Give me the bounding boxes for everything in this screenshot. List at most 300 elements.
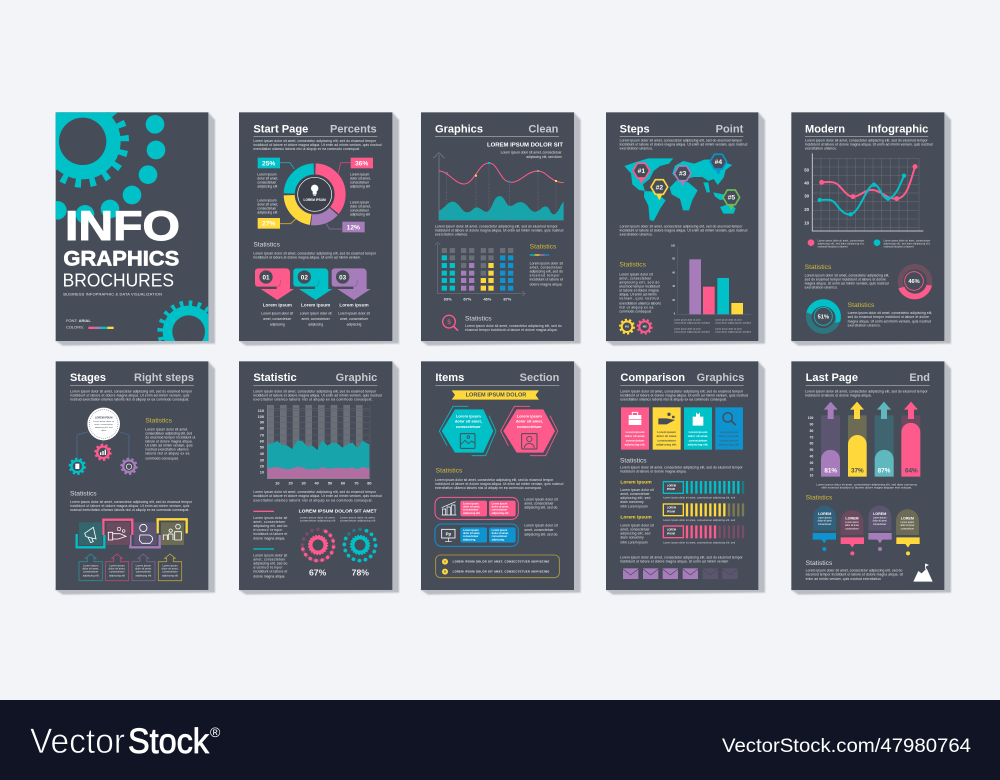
heading bbox=[620, 372, 744, 385]
tag yellow: LOREM bbox=[901, 516, 914, 520]
tile yellow: dolor sit amet, bbox=[656, 434, 677, 438]
side text two: Lorem ipsum dolor sit bbox=[620, 523, 654, 527]
callout teal bbox=[79, 554, 102, 581]
side text one: nibh Lorem ipsum bbox=[620, 504, 648, 508]
row: blue items: Lorem ipsum bbox=[463, 529, 479, 532]
step 01: 01 bbox=[262, 274, 270, 281]
callout text blocks: Lorem ipsum bbox=[350, 173, 369, 177]
note teal: Lorem ipsum dolor sit bbox=[253, 554, 287, 558]
note teal: dolore magna aliqua. bbox=[253, 575, 285, 579]
icon square: people bbox=[161, 522, 184, 545]
statistics text bbox=[253, 251, 377, 259]
statistics text: veniam, quis nostrud bbox=[619, 297, 659, 301]
column pink bbox=[901, 402, 920, 477]
meter teal: IPSUM bbox=[667, 488, 675, 491]
statistics side text: labore et dolore magna aliqua. bbox=[145, 440, 193, 444]
row: pink items: adipiscing elit. bbox=[463, 512, 481, 515]
heading: Graphic bbox=[336, 372, 377, 384]
intro text: exercitation ullamco. bbox=[805, 146, 837, 150]
note teal bbox=[253, 548, 287, 579]
intro text: exercitation ullamco laboris nisi ut aliquip ex ea commodo consequat. bbox=[253, 147, 360, 151]
row: blue items bbox=[435, 524, 518, 546]
chart notes: Lorem ipsum dolor sit amet bbox=[674, 319, 701, 322]
statistics text: eiusmod tempor incididunt bbox=[619, 284, 660, 288]
title: GRAPHICS: GRAPHICS bbox=[63, 248, 179, 271]
heading: Clean bbox=[528, 123, 559, 135]
intro text: Lorem ipsum dolor sit amet, consectetur adipiscing elit, sed do eiusmod tempor bbox=[620, 138, 743, 142]
callout pink: Lorem ipsum bbox=[109, 563, 125, 567]
bar chart: 20 bbox=[672, 300, 676, 302]
row side text: Lorem ipsum dolor sit bbox=[524, 524, 558, 528]
statistics text: Lorem ipsum dolor sit amet, consectetur adipiscing elit, sed do eiusmod tempor bbox=[253, 251, 377, 255]
side text two: amet, consectetuer bbox=[620, 527, 651, 531]
statistics text one: sed do eiusmod tempor incididunt ut labore et dolore bbox=[805, 277, 886, 281]
intro text: nostrud exercitation ullamco laboris nisi ut aliquip ex ea commodo consequat. bbox=[70, 397, 189, 401]
note teal: incididunt ut labore et bbox=[253, 570, 287, 574]
intro text: incididunt ut labore et dolore magna aliqua. Ut enim ad minim veniam, quis bbox=[70, 393, 190, 397]
row side text bbox=[524, 497, 558, 536]
intro text: Lorem ipsum dolor sit amet, consectetur adipiscing elit, sed do eiusmod tempor bbox=[253, 389, 377, 393]
statistics text bbox=[530, 244, 563, 286]
area chart: 90 bbox=[260, 421, 264, 425]
stepped frame bbox=[77, 519, 187, 547]
panel: start page bbox=[239, 112, 399, 346]
gear: pink bbox=[95, 445, 111, 460]
intro text bbox=[620, 389, 748, 401]
tag blue: consectetuer bbox=[818, 523, 832, 526]
body text bbox=[620, 224, 747, 236]
tile blue: adipiscing elit. bbox=[719, 443, 740, 447]
tile blue: dolor sit amet, bbox=[719, 434, 739, 438]
body text bbox=[435, 224, 563, 236]
bar chart: 0 bbox=[674, 313, 676, 315]
row: blue items: dolor sit amet, bbox=[492, 532, 509, 535]
statistics footer bbox=[465, 315, 562, 332]
step 02: 02 bbox=[301, 274, 308, 281]
gear: purple bbox=[121, 459, 137, 474]
gauges title: Lorem ipsum dolor sit amet, bbox=[340, 516, 376, 519]
donut 46%: 46% bbox=[908, 279, 920, 285]
area chart: 70 bbox=[260, 433, 264, 437]
callouts: percentages: 12% bbox=[347, 224, 360, 231]
colors legend: COLORS: bbox=[66, 325, 84, 330]
callout yellow: consectetuer bbox=[162, 569, 178, 573]
callout text blocks: adipiscing elit bbox=[257, 185, 277, 189]
gear: teal bbox=[70, 459, 85, 474]
node: white circle bbox=[87, 408, 120, 440]
column teal: 87% bbox=[878, 467, 891, 474]
gauges title: Lorem ipsum dolor sit amet, bbox=[300, 516, 336, 519]
tile yellow bbox=[653, 407, 681, 450]
icon: bottom gear bbox=[157, 300, 208, 341]
square pictogram chart: 46% bbox=[483, 297, 492, 302]
callout text blocks: adipiscing elit bbox=[257, 211, 277, 215]
hexagon pink bbox=[501, 406, 558, 456]
body text bbox=[253, 490, 382, 502]
chart title bbox=[487, 143, 564, 159]
statistics text bbox=[620, 458, 744, 474]
intro text: exercitation ullamco. bbox=[620, 146, 653, 150]
step 01: amet, consectetuer bbox=[263, 317, 292, 321]
icon: pink gear bbox=[638, 320, 652, 334]
area chart: 20 bbox=[289, 482, 293, 486]
hexagon pink: Lorem ipsum bbox=[517, 413, 542, 418]
statistics side text: Ut enim ad minim veniam, quis bbox=[145, 444, 193, 448]
chart notes: Lorem ipsum dolor sit amet bbox=[715, 319, 742, 322]
statistics text: Lorem ipsum dolor sit amet, consectetur adipiscing elit, sed do eiusmod tempor bbox=[620, 466, 744, 470]
body text: exercitation ullamco laboris nisi ut aliquip ex ea commodo consequat. bbox=[253, 498, 373, 502]
note teal: eiusmod tempor bbox=[253, 566, 284, 570]
step 02: Lorem ipsum dolor sit bbox=[300, 311, 332, 315]
statistics side text: laboris nisi ut aliquip ex ea bbox=[145, 452, 189, 456]
bar chart: 100 bbox=[671, 245, 676, 247]
bar chart: 80 bbox=[672, 259, 676, 261]
area chart bbox=[258, 405, 371, 486]
side text two: Lorem ipsum bbox=[620, 515, 652, 521]
node: white circle: amet, consectetuer bbox=[94, 423, 113, 426]
tile teal: consectetuer bbox=[689, 438, 708, 442]
title: INFO: INFO bbox=[65, 202, 180, 249]
lower text bbox=[620, 556, 744, 564]
statistics heading: Statistics bbox=[806, 494, 833, 501]
statistics text one: magna aliqua. Ut enim ad minim veniam, quis nostrud bbox=[805, 281, 889, 285]
heading: Stages bbox=[70, 372, 106, 384]
statistics text: Lorem ipsum dolor sit amet, consectetur adipiscing elit, sed do eiusmod tempor bbox=[435, 478, 554, 482]
tile teal bbox=[684, 407, 712, 450]
statistics text: Statistics bbox=[530, 244, 557, 251]
statistics text: amet, consectetuer bbox=[530, 265, 563, 269]
panel: modern infographic bbox=[791, 112, 951, 346]
tile yellow: adipiscing elit. bbox=[656, 443, 677, 447]
icon: light bulb bbox=[311, 185, 318, 196]
heading bbox=[435, 372, 560, 385]
row: blue items: consectetuer bbox=[463, 535, 478, 538]
statistics side text: do eiusmod tempor incididunt ut bbox=[145, 436, 195, 440]
callout purple: Lorem ipsum bbox=[136, 563, 152, 567]
area chart: 60 bbox=[341, 482, 345, 486]
font note: FONT: ARIAL bbox=[66, 318, 91, 323]
statistics text: adipiscing elit, sed do bbox=[619, 280, 659, 284]
line and area chart bbox=[433, 153, 564, 220]
scale labels bbox=[808, 416, 813, 478]
panel: graphics bbox=[421, 112, 581, 346]
side text two: adipiscing elit, sed bbox=[620, 531, 650, 535]
row side text: adipiscing elit, sed do. bbox=[524, 506, 558, 510]
meter pink: LOREM bbox=[667, 529, 676, 532]
statistics text: incididunt ut labore et dolore magna aliqua. Ut enim ad minim veniam, quis nostrud bbox=[435, 482, 563, 486]
heading: Start Page bbox=[253, 123, 308, 135]
line chart: 10 bbox=[804, 220, 810, 225]
gauge 67% bbox=[297, 524, 339, 578]
logo bbox=[30, 722, 221, 761]
intro text bbox=[253, 389, 382, 401]
callout text blocks: consectetuer bbox=[257, 181, 277, 185]
statistics text one bbox=[805, 264, 889, 290]
line chart: 40 bbox=[804, 180, 810, 185]
callout text blocks: dolor sit amet, bbox=[350, 204, 371, 208]
step 02: Lorem ipsum bbox=[301, 302, 330, 307]
square pictogram chart bbox=[435, 242, 525, 302]
tile teal: Lorem ipsum bbox=[689, 430, 708, 434]
side text two: diam nonummy bbox=[620, 535, 644, 539]
footer bar bbox=[0, 700, 1000, 780]
callout teal: consectetuer bbox=[83, 569, 98, 573]
callouts: percentages: 36% bbox=[355, 160, 368, 167]
row one, graphics and steps bbox=[421, 112, 765, 346]
tag pink bbox=[841, 510, 864, 555]
icon square: megaphone bbox=[79, 522, 102, 545]
meter teal: LOREM bbox=[667, 484, 676, 487]
intro text: incididunt ut labore et dolore magna aliqua. Ut enim ad minim veniam, quis nostrud bbox=[620, 142, 747, 146]
scale labels: 20 bbox=[810, 467, 813, 471]
scale labels: 70 bbox=[810, 435, 813, 439]
intro text: incididunt ut labore et dolore magna aliqua. Ut enim ad minim veniam, quis nostrud bbox=[253, 393, 382, 397]
column purple bbox=[821, 402, 840, 477]
statistics side text: commodo consequat. bbox=[145, 457, 179, 461]
legend: euismod tincidunt ut laoreet bbox=[884, 246, 914, 249]
statistics text: amet, consectetuer bbox=[619, 276, 652, 280]
connectors bbox=[77, 432, 129, 459]
area chart: 50 bbox=[328, 482, 332, 486]
statistics text bbox=[70, 500, 193, 512]
legend: adipiscing elit, sed diam adipiscing elit, bbox=[884, 243, 931, 246]
icon: magnifier: $ bbox=[447, 320, 451, 326]
tag yellow bbox=[896, 509, 920, 555]
step 01 bbox=[255, 268, 294, 327]
statistics text: nisi ut aliquip ex ea bbox=[619, 305, 653, 309]
chart notes: consectetuer adipiscing elit, sed diam bbox=[715, 331, 751, 334]
callout purple: consectetuer bbox=[136, 569, 151, 573]
tag blue: Lorem ipsum bbox=[818, 517, 831, 520]
body text: exercitation ullamco. bbox=[620, 232, 653, 236]
step 01: adipiscing bbox=[270, 323, 285, 327]
side text two: nibh Lorem ipsum bbox=[620, 540, 648, 544]
area chart: 40 bbox=[315, 482, 319, 486]
note teal: adipiscing elit, sed do bbox=[253, 562, 287, 566]
statistics side text: nostrud exercitation ullamco bbox=[145, 448, 189, 452]
statistics heading: Statistics bbox=[253, 241, 281, 248]
icon: yellow gear bbox=[620, 320, 634, 334]
legend bbox=[808, 239, 931, 249]
column teal bbox=[875, 402, 894, 477]
column pink: 64% bbox=[905, 467, 918, 474]
gauges title: LOREM IPSUM DOLOR SIT AMET bbox=[299, 509, 377, 514]
heading: Steps bbox=[620, 123, 650, 135]
statistics text: incididunt ut labore et dolore magna aliqua. bbox=[620, 470, 687, 474]
intro text: incididunt ut labore et dolore magna aliqua. bbox=[805, 393, 872, 397]
title: BROCHURES: BROCHURES bbox=[63, 270, 174, 291]
statistics text: Statistics bbox=[619, 261, 647, 268]
tag blue: dolor sit amet bbox=[818, 520, 832, 523]
intro text bbox=[620, 138, 747, 150]
map pin 2: #2 bbox=[656, 184, 663, 191]
area chart: 60 bbox=[260, 439, 264, 443]
area chart: 110 bbox=[258, 409, 264, 413]
step 01: Lorem ipsum bbox=[263, 302, 292, 307]
row: pink items: Lorem ipsum bbox=[463, 502, 479, 505]
heading bbox=[435, 123, 559, 137]
chart notes: Lorem ipsum dolor sit amet bbox=[674, 328, 701, 331]
hexagon pink: dolor sit amet, bbox=[516, 419, 543, 424]
scale labels: 100 bbox=[808, 416, 813, 420]
area chart: 10 bbox=[260, 471, 264, 475]
row: blue items: Lorem ipsum bbox=[492, 529, 508, 532]
tile yellow: consectetuer bbox=[657, 438, 677, 442]
callout teal: dolor sit amet, bbox=[82, 566, 99, 570]
row side text: amet, consectetuer bbox=[524, 528, 555, 532]
intro text bbox=[805, 138, 933, 150]
callout text blocks: consectetuer bbox=[350, 208, 370, 212]
tag blue bbox=[813, 506, 836, 551]
body text: incididunt ut labore et dolore magna aliqua. Ut enim ad minim veniam, quis nostrud bbox=[620, 228, 747, 232]
meter teal: Lorem ipsum dolor sit amet, consectetuer adipiscing elit, sed bbox=[663, 497, 736, 500]
callouts: percentages: 27% bbox=[262, 221, 275, 228]
scale labels: 30 bbox=[810, 461, 813, 465]
callout text blocks: consectetuer bbox=[350, 181, 370, 185]
node: white circle: LOREM IPSUM bbox=[95, 416, 112, 419]
area chart: 50 bbox=[260, 445, 264, 449]
map pin 4 bbox=[710, 154, 727, 175]
hexagon pink: consectetuer bbox=[517, 424, 542, 429]
image id: VectorStock.com/47980764 bbox=[722, 736, 971, 757]
chart title: Lorem ipsum dolor sit amet, consectetuer bbox=[501, 150, 563, 154]
step 02: adipiscing bbox=[308, 323, 323, 327]
intro text bbox=[70, 389, 193, 401]
intro text: exercitation ullamco laboris nisi ut aliquip ex ea commodo consequat. bbox=[620, 397, 727, 401]
row: pink items: dolor sit amet, bbox=[492, 506, 509, 509]
area chart: 10 bbox=[275, 482, 279, 486]
callout text blocks: Lorem ipsum bbox=[257, 199, 277, 203]
intro text bbox=[805, 389, 929, 397]
intro text: exercitation ullamco laboris nisi ut aliquip ex ea commodo consequat. bbox=[253, 397, 373, 401]
tile pink: consectetuer bbox=[626, 438, 645, 442]
statistics text bbox=[435, 478, 563, 490]
callout text blocks: Lorem ipsum bbox=[350, 200, 369, 204]
icon square: hand bbox=[107, 522, 130, 545]
node: white circle: Lorem ipsum dolor sit bbox=[93, 420, 114, 423]
statistics footer: eiusmod tempor incididunt ut labore et dolore magna aliqua. bbox=[465, 328, 558, 332]
note teal: amet, consectetuer bbox=[253, 558, 286, 562]
intro text bbox=[253, 139, 382, 151]
column purple: 81% bbox=[824, 467, 837, 474]
heading bbox=[253, 123, 377, 137]
callout pink bbox=[105, 554, 129, 581]
note pink: adipiscing elit, sed do bbox=[253, 524, 287, 528]
meter yellow: Lorem ipsum dolor sit amet, consectetuer adipiscing elit, sed bbox=[663, 519, 736, 522]
bar chart bbox=[671, 245, 751, 315]
statistics text two: sed do eiusmod tempor incididunt ut labore et dolore bbox=[848, 315, 929, 319]
gauges title: consectetuer adipiscing elit bbox=[300, 519, 336, 522]
chart title: adipiscing elit, sed diam bbox=[526, 155, 562, 159]
heading: Modern bbox=[805, 123, 845, 135]
statistics text: incididunt ut labore et dolore magna aliqua. Ut enim ad minim veniam. bbox=[253, 255, 361, 259]
scale labels: 80 bbox=[810, 429, 813, 433]
body text: exercitation ullamco. bbox=[435, 232, 468, 236]
heading: Infographic bbox=[868, 123, 928, 135]
gauge 67%: 67% bbox=[309, 568, 327, 578]
hexagon teal: consectetuer bbox=[456, 424, 481, 429]
side text one: amet, consectetuer bbox=[620, 492, 651, 496]
list box: LOREM IPSUM DOLOR SIT AMET, CONSECTETUER ADIPISCING bbox=[453, 569, 549, 573]
heading: Last Page bbox=[806, 372, 858, 384]
body text: Lorem ipsum dolor sit amet, consectetur adipiscing elit, sed do eiusmod tempor bbox=[620, 224, 743, 228]
heading: Percents bbox=[330, 123, 377, 135]
body text: Lorem ipsum dolor sit amet, consectetur adipiscing elit, sed do eiusmod tempor bbox=[435, 224, 559, 228]
body text: incididunt ut labore et dolore magna aliqua. Ut enim ad minim veniam, quis nostrud bbox=[253, 494, 382, 498]
statistics text two: Lorem ipsum dolor sit amet, consectetur adipiscing elit, bbox=[848, 311, 932, 315]
line chart: 50 bbox=[804, 167, 810, 172]
step 03: 03 bbox=[339, 274, 347, 281]
donut 51% bbox=[806, 299, 841, 331]
node: white circle: diam bbox=[101, 430, 106, 432]
statistics heading: Statistics bbox=[70, 491, 97, 498]
heading: End bbox=[909, 372, 930, 384]
node: white circle: adipiscing elit, sed bbox=[95, 426, 113, 429]
row: pink items: consectetuer bbox=[463, 509, 478, 512]
row: blue items: adipiscing. bbox=[463, 538, 476, 541]
gauge 78% bbox=[339, 524, 381, 578]
meter yellow: IPSUM bbox=[667, 510, 675, 513]
panel: comparison bbox=[606, 361, 765, 595]
icon: pink gear: #02 bbox=[643, 327, 647, 329]
chart notes: consectetuer adipiscing elit, sed diam bbox=[674, 322, 710, 325]
statistics footer: Lorem ipsum dolor sit amet, consectetur adipiscing elit, sed do bbox=[806, 569, 902, 573]
step 01: Lorem ipsum dolor sit bbox=[261, 311, 293, 315]
intro text: Lorem ipsum dolor sit amet, consectetur adipiscing elit, sed do eiusmod tempor bbox=[805, 138, 929, 142]
scale labels: 10 bbox=[810, 474, 813, 478]
callout yellow: Lorem ipsum bbox=[162, 563, 178, 567]
logo: ® bbox=[210, 724, 221, 740]
statistics text: Lorem ipsum dolor sit bbox=[619, 272, 653, 276]
map pin 3: #3 bbox=[679, 171, 687, 178]
statistics text one: Statistics bbox=[805, 264, 832, 271]
row: blue items: dolor sit amet, bbox=[463, 532, 480, 535]
step 02: amet, consectetuer bbox=[302, 317, 331, 321]
ribbon banner: LOREM IPSUM DOLOR bbox=[466, 393, 526, 399]
statistics text: ut labore et dolore magna bbox=[619, 288, 659, 292]
logo: Stock bbox=[128, 722, 209, 761]
callout text blocks: dolor sit amet, bbox=[257, 203, 278, 207]
hexagon teal bbox=[439, 406, 496, 456]
tile blue bbox=[715, 407, 743, 450]
intro text: Lorem ipsum dolor sit amet, consectetur adipiscing elit, sed do eiusmod tempor bbox=[620, 389, 744, 393]
side text two bbox=[620, 515, 654, 544]
area chart: 30 bbox=[302, 482, 306, 486]
note pink: Lorem ipsum dolor sit bbox=[253, 516, 287, 520]
square pictogram chart: 67% bbox=[463, 297, 472, 302]
side text one: Lorem ipsum bbox=[620, 479, 652, 485]
list box: LOREM IPSUM DOLOR SIT AMET, CONSECTETUER ADIPISCING bbox=[453, 560, 549, 564]
statistics side text bbox=[145, 418, 195, 461]
meter pink bbox=[663, 525, 743, 544]
statistics text: Statistics bbox=[620, 458, 647, 465]
statistics text: Lorem ipsum dolor sit bbox=[530, 261, 563, 265]
row: pink items: consectetuer bbox=[492, 509, 507, 512]
area chart: 70 bbox=[354, 482, 358, 486]
callout text blocks: dolor sit amet, bbox=[350, 177, 371, 181]
heading bbox=[620, 123, 744, 137]
statistics text bbox=[619, 261, 661, 314]
callout yellow: adipiscing elit bbox=[162, 574, 178, 578]
statistics text: adipiscing elit, sed do bbox=[530, 269, 563, 273]
callout yellow: dolor sit amet, bbox=[162, 566, 179, 570]
tag pink: dolor sit amet bbox=[845, 524, 859, 527]
line chart bbox=[804, 153, 923, 231]
statistics text one: Lorem ipsum dolor sit amet, consectetur adipiscing elit, bbox=[805, 273, 889, 277]
world map bbox=[624, 158, 736, 221]
tag purple: Lorem ipsum bbox=[873, 517, 886, 520]
statistics text two: Statistics bbox=[848, 302, 875, 309]
